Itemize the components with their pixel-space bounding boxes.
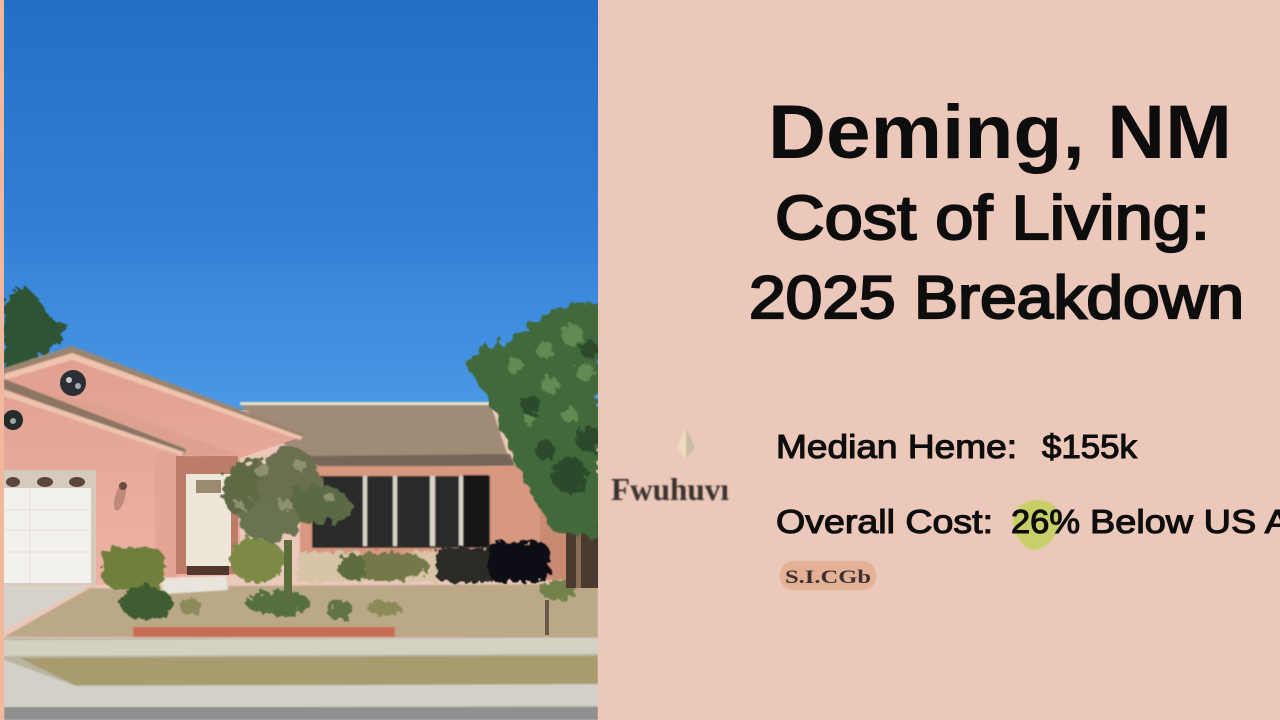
stat: overall cost: Below US A: [1090, 503, 1280, 540]
wall lamp: [114, 482, 127, 510]
shrubs: [102, 537, 576, 620]
lower gable roof: [4, 379, 240, 456]
left edge strip: [0, 0, 4, 720]
subtitle line 1: Cost of Living:: [775, 184, 1210, 253]
photo sky: [4, 0, 598, 410]
stat: overall cost: [776, 500, 1280, 550]
stat: overall cost: 26%: [1011, 503, 1080, 540]
panel: house photo: [3, 0, 603, 720]
garbled caption left of stats: Fwuhuvı: [611, 471, 729, 507]
title: Deming, NM: [768, 90, 1232, 175]
far roof: [240, 402, 515, 470]
large right tree: [464, 302, 603, 588]
tree behind house, left: [4, 285, 70, 368]
stat: median home: Median Heme:: [776, 428, 1017, 465]
decorative icon: small diamond: [677, 428, 695, 459]
small front tree: [222, 448, 350, 600]
stat: median home: $155k: [1042, 428, 1138, 465]
badge: [780, 561, 876, 590]
small sapling, lower right: [545, 600, 549, 635]
garage door: [4, 470, 96, 585]
badge: S.I.CGb: [785, 567, 871, 588]
stat: median home: [776, 428, 1138, 465]
subtitle line 2: 2025 Breakdown: [749, 264, 1244, 331]
yard: [4, 576, 598, 638]
upper gable roof: [4, 346, 305, 440]
round attic windows: [3, 370, 86, 430]
sidewalk and curb: [4, 638, 598, 720]
stat: overall cost: Overall Cost:: [776, 503, 993, 540]
right wing wall and windows: [300, 466, 570, 580]
highlight blob: [1013, 500, 1060, 550]
main house wall: [4, 358, 298, 585]
flower bed and dark hedge: [298, 542, 550, 582]
front door: [176, 456, 238, 575]
